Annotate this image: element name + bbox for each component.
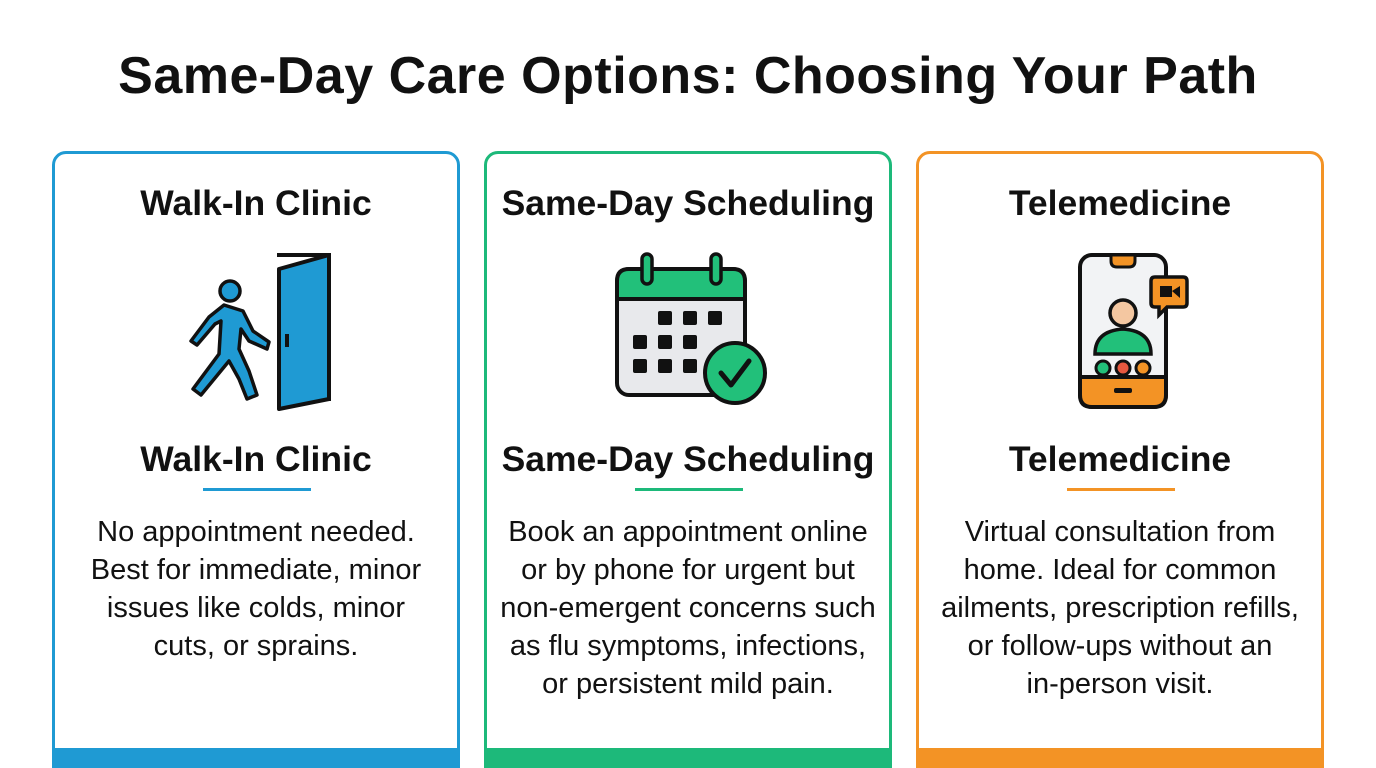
panel heading: Walk-In Clinic	[140, 183, 372, 223]
panel subheading: Telemedicine	[1009, 439, 1231, 479]
description	[941, 516, 1299, 700]
description: ailments, prescription refills,	[941, 592, 1299, 624]
description: cuts, or sprains.	[154, 630, 358, 662]
underline	[203, 488, 311, 491]
description: or persistent mild pain.	[542, 668, 834, 700]
icon: walking person and door	[189, 253, 331, 411]
description: non-emergent concerns such	[500, 592, 876, 624]
panel heading: Same-Day Scheduling	[502, 183, 874, 223]
panel subheading: Walk-In Clinic	[140, 439, 372, 479]
icon: phone video call	[1078, 253, 1189, 409]
description: Virtual consultation from	[965, 516, 1275, 548]
bottom bar	[919, 748, 1321, 768]
description: issues like colds, minor	[107, 592, 405, 624]
title: Same-Day Care Options: Choosing Your Path	[118, 47, 1258, 105]
icon: calendar with check	[615, 252, 767, 405]
description	[500, 516, 876, 700]
panel subheading: Same-Day Scheduling	[502, 439, 874, 479]
underline	[1067, 488, 1175, 491]
description: home. Ideal for common	[964, 554, 1276, 586]
description: or by phone for urgent but	[521, 554, 855, 586]
description: or follow-ups without an	[968, 630, 1272, 662]
panel heading: Telemedicine	[1009, 183, 1231, 223]
description: in-person visit.	[1027, 668, 1213, 700]
description: as flu symptoms, infections,	[510, 630, 866, 662]
panel: same-day scheduling	[484, 151, 892, 768]
description: Book an appointment online	[508, 516, 868, 548]
description: No appointment needed.	[97, 516, 415, 548]
bottom bar	[55, 748, 457, 768]
panel: telemedicine	[916, 151, 1324, 768]
description: Best for immediate, minor	[91, 554, 421, 586]
panel: walk-in clinic	[52, 151, 460, 768]
underline	[635, 488, 743, 491]
bottom bar	[487, 748, 889, 768]
description	[91, 516, 421, 662]
